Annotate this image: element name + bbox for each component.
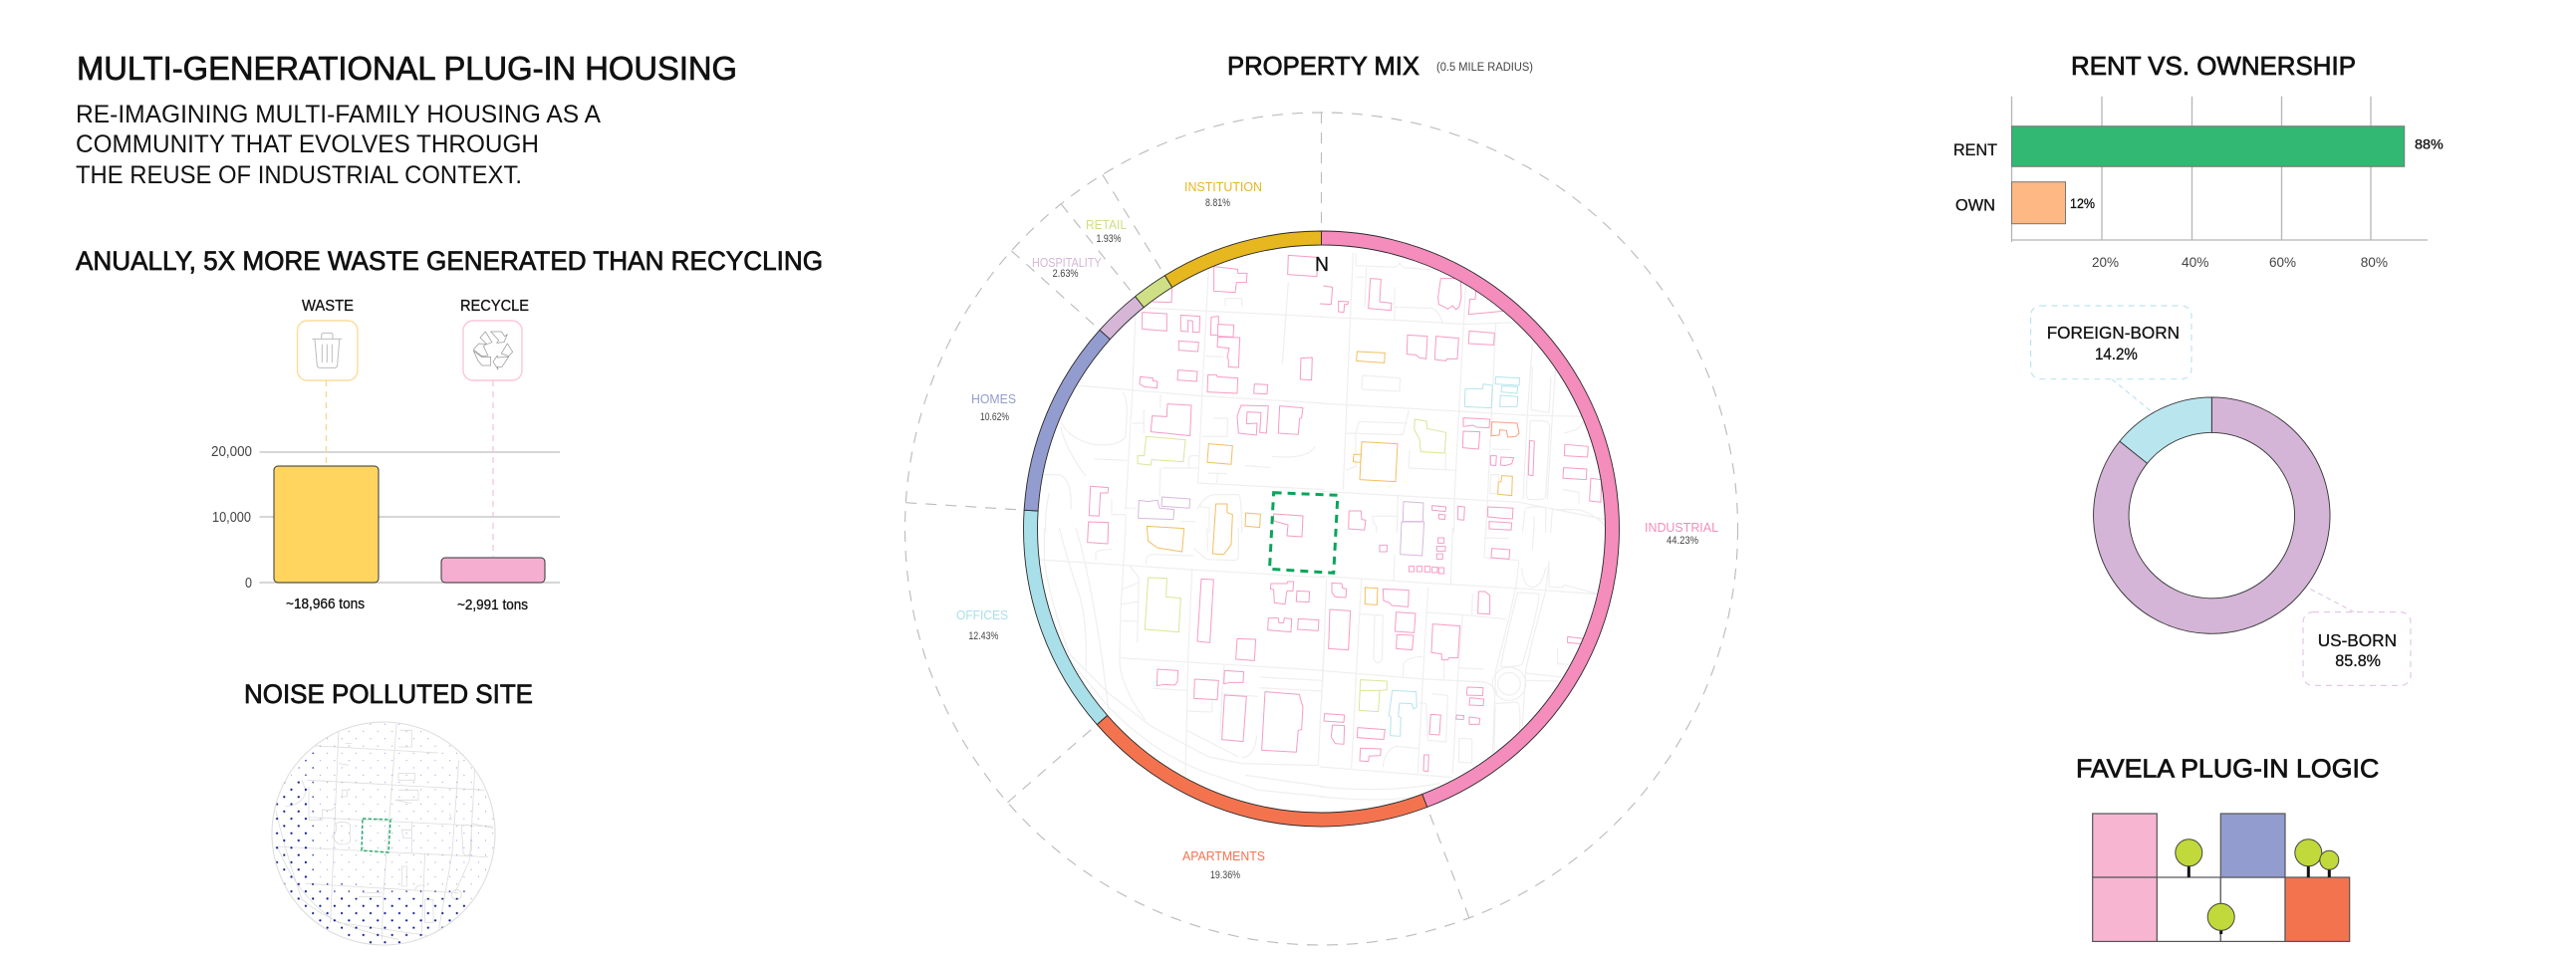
- south-west quadrant: [1039, 504, 1325, 797]
- bar: own: [2012, 182, 2066, 224]
- bar chart gridlines and axis labels: 10,000: [212, 510, 251, 526]
- label: homes: [971, 391, 1016, 423]
- ring segment: apartments: [1097, 715, 1427, 827]
- label: offices: OFFICES: [956, 607, 1008, 622]
- label: rent: RENT: [1953, 140, 1997, 159]
- subtitle text block: RE-IMAGINING MULTI-FAMILY HOUSING AS A: [76, 101, 601, 128]
- panel: noise map: [272, 722, 495, 951]
- icon: recycling arrows: [463, 321, 522, 380]
- axis tick labels: 60%: [2269, 254, 2296, 270]
- heading: rent vs ownership: RENT VS. OWNERSHIP: [2071, 51, 2356, 81]
- heading: noise polluted site: NOISE POLLUTED SITE: [244, 679, 533, 709]
- south-east quadrant: [1320, 522, 1599, 800]
- site map: streets and buildings: [1039, 253, 1606, 800]
- label: waste: WASTE: [302, 298, 354, 315]
- ring segment: retail: [1136, 276, 1172, 308]
- label: recycle: RECYCLE: [460, 298, 529, 315]
- bar chart gridlines and axis labels: [211, 444, 560, 592]
- icon: trash can: [297, 321, 358, 380]
- panel: birthplace donut chart: [2031, 306, 2411, 685]
- label: retail: [1086, 217, 1127, 245]
- label: institution: 8.81%: [1205, 197, 1230, 209]
- bar chart gridlines and axis labels: 20,000: [211, 444, 252, 460]
- ring segment: offices: [1024, 510, 1108, 725]
- label: hospitality: HOSPITALITY: [1032, 255, 1102, 270]
- north marker: N: [1315, 254, 1329, 276]
- outer dashed circle and radial dividers: [904, 113, 1737, 945]
- callout: us-born: [2303, 590, 2411, 685]
- subtitle text block: THE REUSE OF INDUSTRIAL CONTEXT.: [76, 161, 522, 189]
- ring segment: institution: [1164, 231, 1321, 287]
- value: waste tons: ~18,966 tons: [286, 597, 365, 612]
- bar: rent: [2012, 126, 2405, 166]
- label: offices: [956, 607, 1008, 642]
- panel: rent vs ownership bar chart: [1953, 97, 2444, 270]
- donut: foreign-born: [2120, 397, 2211, 463]
- note: radius: (0.5 MILE RADIUS): [1436, 62, 1533, 74]
- label: own: OWN: [1955, 196, 1995, 215]
- heading: favela plug-in logic: FAVELA PLUG-IN LOGIC: [2076, 753, 2379, 783]
- label: apartments: APARTMENTS: [1182, 848, 1265, 863]
- gridlines and axis: [2012, 97, 2428, 242]
- label: offices: 12.43%: [968, 630, 999, 642]
- axis tick labels: [2092, 254, 2388, 270]
- axis tick labels: 40%: [2182, 254, 2208, 270]
- label: industrial: 44.23%: [1667, 535, 1698, 547]
- label: homes: 10.62%: [980, 411, 1009, 423]
- value: recycle tons: ~2,991 tons: [457, 598, 528, 613]
- panel: property mix radial map: [904, 113, 1737, 945]
- label: institution: INSTITUTION: [1184, 179, 1262, 194]
- blocks: [2093, 814, 2350, 941]
- label: apartments: 19.36%: [1210, 869, 1240, 881]
- label: industrial: INDUSTRIAL: [1645, 520, 1718, 535]
- label: apartments: [1182, 848, 1265, 881]
- label: retail: RETAIL: [1086, 217, 1127, 232]
- title: MULTI-GENERATIONAL PLUG-IN HOUSING: [77, 50, 737, 87]
- north-east quadrant: [1320, 253, 1606, 533]
- subtitle text block: COMMUNITY THAT EVOLVES THROUGH: [76, 130, 539, 158]
- callout: foreign-born: FOREIGN-BORN: [2047, 323, 2180, 343]
- heading: property mix: PROPERTY MIX: [1227, 51, 1419, 81]
- ring segment: industrial: [1321, 231, 1619, 807]
- label: institution: [1184, 179, 1262, 209]
- value: 88 percent: 88%: [2415, 135, 2444, 151]
- site building: [1274, 514, 1303, 537]
- panel: waste and recycling chart: [211, 298, 560, 613]
- label: retail: 1.93%: [1096, 233, 1122, 245]
- dashed leader lines: [327, 380, 493, 557]
- ring segment: hospitality: [1100, 297, 1144, 340]
- north-west quadrant: [1041, 255, 1325, 533]
- site boundary: [362, 819, 390, 852]
- callout: foreign-born: [2031, 306, 2191, 411]
- bar chart gridlines and axis labels: 0: [245, 576, 252, 592]
- label: homes: HOMES: [971, 391, 1016, 406]
- heading: waste vs recycling: ANUALLY, 5X MORE WASTE GENERATED THAN RECYCLING: [76, 246, 823, 276]
- bar: waste: [274, 466, 379, 583]
- site boundary: [1269, 493, 1338, 573]
- label: hospitality: [1032, 255, 1102, 280]
- subtitle text block: [76, 101, 601, 189]
- panel: favela plug-in diagram: [2093, 814, 2350, 941]
- trees: [2176, 840, 2339, 934]
- callout: foreign-born: 14.2%: [2095, 345, 2138, 363]
- label: industrial: [1645, 520, 1718, 547]
- callout: us-born: US-BORN: [2318, 630, 2397, 650]
- callout: us-born: 85.8%: [2335, 651, 2381, 670]
- ring segment: homes: [1024, 330, 1110, 511]
- bar: recycle: [441, 558, 545, 583]
- axis tick labels: 80%: [2361, 254, 2388, 270]
- value: 12 percent: 12%: [2070, 195, 2095, 211]
- donut: us-born: [2094, 397, 2330, 633]
- label: hospitality: 2.63%: [1053, 268, 1079, 280]
- axis tick labels: 20%: [2092, 254, 2119, 270]
